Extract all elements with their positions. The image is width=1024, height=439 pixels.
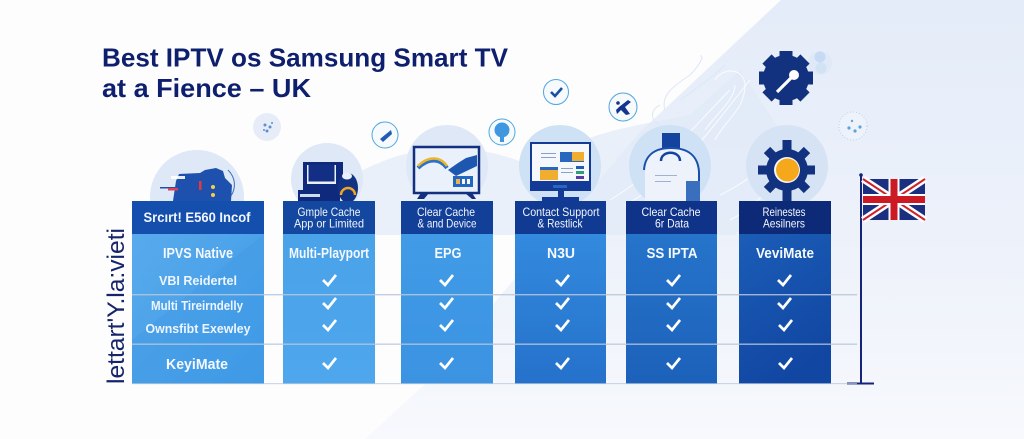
icon: gear with orange centre: [746, 125, 828, 207]
column 5: SS IPTA: 6r Data: [655, 216, 689, 230]
icon: laptop and mascot: [291, 143, 363, 215]
column 1: feature names: [132, 201, 264, 384]
column 3: EPG: EPG: [434, 246, 462, 262]
column 6: VeviMate: Reinestes: [762, 205, 806, 219]
column 3: EPG: & and Device: [418, 216, 477, 230]
icon: dotted bubble right: [839, 112, 867, 140]
column 2: Multi-Playport: [283, 201, 375, 384]
column 4: N3U: [515, 201, 606, 384]
column 6: VeviMate: Aesilners: [763, 216, 805, 230]
small icon: K badge: [609, 93, 637, 121]
column 6: VeviMate: VeviMate: [756, 246, 814, 262]
small icon: dotted bubble left: [253, 113, 281, 141]
icon: television: [406, 125, 488, 207]
column 4: N3U: N3U: [547, 246, 575, 262]
column 5: SS IPTA: SS IPTA: [646, 246, 698, 262]
table row dividers: [132, 294, 857, 384]
icon: large gear with wrench: [759, 51, 832, 105]
small icon: check badge: [544, 80, 568, 104]
column 1: feature names: Srcırt! E560 Incof: [144, 210, 251, 225]
column 1: feature names: VBI Reidertel: [159, 273, 237, 288]
column 4: N3U: & Restlick: [538, 216, 583, 230]
column 5: SS IPTA: Clear Cache: [642, 205, 701, 219]
column 4: N3U: Contact Support: [522, 205, 600, 219]
column 1: feature names: Ownsfibt Exewley: [146, 321, 251, 336]
column 3: EPG: Clear Cache: [417, 205, 475, 219]
column 1: feature names: Multi Tireirndelly: [151, 298, 244, 313]
column 1: feature names: IPVS Native: [163, 246, 233, 262]
small icon: satellite: [372, 122, 398, 148]
column 3: EPG: [401, 201, 493, 384]
icon: desktop monitor: [519, 125, 601, 207]
column 5: SS IPTA: [626, 201, 717, 384]
column 2: Multi-Playport: Gmple Cache: [298, 205, 361, 219]
column 6: VeviMate: [739, 201, 831, 384]
vertical axis label: lettart'Y.la:vieti: [103, 228, 130, 384]
column 1: feature names: KeyiMate: [166, 357, 228, 373]
title: [102, 42, 509, 103]
column 2: Multi-Playport: Multi-Playport: [289, 246, 369, 262]
column 2: Multi-Playport: App or Limited: [294, 216, 364, 230]
title: Best IPTV os Samsung Smart TV: [102, 42, 509, 72]
title: at a Fience – UK: [102, 73, 311, 103]
small icon: brain: [489, 119, 515, 145]
UK flag on pole: [847, 173, 925, 384]
icon: router device: [150, 150, 244, 244]
icon: document bag: [629, 125, 711, 207]
